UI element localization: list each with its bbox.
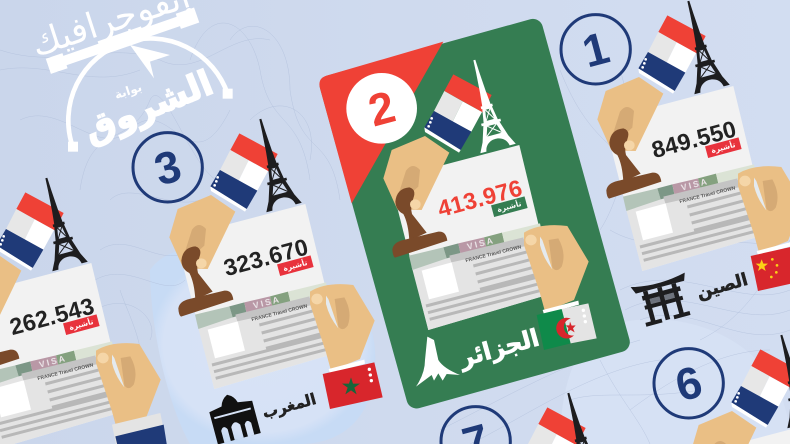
hands and stamp xyxy=(0,254,161,432)
French flag sleeve xyxy=(638,15,706,94)
visa document xyxy=(604,86,769,271)
rank badge 3: 3 xyxy=(149,140,186,195)
visa tag xyxy=(277,255,314,276)
visa count: 323.670 xyxy=(221,234,311,281)
French flag sleeve xyxy=(210,133,278,212)
hands and stamp xyxy=(169,195,375,373)
visa strip text: FRANCE Travel CROWN xyxy=(251,303,308,323)
green panel background xyxy=(317,17,632,411)
Eiffel tower xyxy=(551,388,610,444)
country name: الجزائر xyxy=(455,324,542,373)
visa document xyxy=(176,204,341,389)
visa strip text: FRANCE Travel CROWN xyxy=(465,244,522,264)
visa strip text: FRANCE Travel CROWN xyxy=(37,362,94,382)
Eiffel tower xyxy=(457,55,516,153)
icon: martyrs monument xyxy=(416,337,460,387)
French flag sleeve xyxy=(731,349,790,428)
card: rank 7 partial xyxy=(441,388,610,444)
French flag sleeve xyxy=(424,74,492,153)
French flag sleeve xyxy=(0,192,64,271)
Algerian flag sleeve xyxy=(537,303,597,350)
visa strip text: FRANCE Travel CROWN xyxy=(679,185,736,205)
visa document xyxy=(0,263,127,444)
rank badge 3 xyxy=(133,133,202,202)
red corner triangle xyxy=(319,42,443,203)
visa tag: تأشيرة xyxy=(710,139,737,155)
visa strip text: VISA xyxy=(38,353,68,370)
hands and stamp xyxy=(383,136,589,314)
visa strip text xyxy=(33,347,94,382)
country name: الصين xyxy=(695,270,750,303)
French flag sleeve xyxy=(518,407,586,444)
visa tag xyxy=(705,137,742,158)
card: Morocco rank 3 xyxy=(133,114,383,444)
visa count: 262.543 xyxy=(7,293,97,340)
hands and stamp xyxy=(597,77,790,255)
card: China rank 1 xyxy=(561,0,790,328)
icon: Moroccan gate xyxy=(206,389,261,444)
icon: pagoda gate xyxy=(631,273,696,328)
visa tag: تأشيرة xyxy=(68,316,95,332)
country name: المغرب xyxy=(260,390,318,422)
visa document xyxy=(697,420,790,444)
visa strip text: VISA xyxy=(252,294,282,311)
Eiffel tower xyxy=(29,173,88,271)
visa tag: تأشيرة xyxy=(496,198,523,214)
logo name: الشروق xyxy=(78,63,219,151)
visa strip text xyxy=(461,229,522,264)
hands and stamp xyxy=(690,411,790,444)
rank badge 2 xyxy=(346,73,417,144)
Eiffel tower xyxy=(764,330,790,428)
logo: infographic portal xyxy=(26,0,233,152)
rank badge 7 xyxy=(441,407,510,444)
visa count: 849.550 xyxy=(649,116,739,163)
visa strip text xyxy=(675,170,736,205)
card: left partial rank 5 xyxy=(0,173,169,444)
visa document xyxy=(390,145,555,330)
logo pen-tool icon xyxy=(48,15,233,152)
Moroccan flag sleeve xyxy=(323,362,383,409)
visa tag xyxy=(63,314,100,335)
rank badge 1: 1 xyxy=(577,22,614,77)
card: rank 6 partial xyxy=(654,330,790,444)
rank badge 6: 6 xyxy=(670,356,707,411)
visa strip text: VISA xyxy=(466,235,496,252)
visa count: 413.976 xyxy=(435,175,525,222)
sleeve flag xyxy=(112,413,169,444)
visa strip text: VISA xyxy=(680,176,710,193)
Chinese flag sleeve xyxy=(751,244,790,291)
card: Algeria green panel xyxy=(317,17,632,411)
rank badge 2: 2 xyxy=(363,81,400,136)
Eiffel tower xyxy=(243,114,302,212)
logo small label: بوابة xyxy=(113,80,144,103)
rank badge 1 xyxy=(561,15,630,84)
Eiffel tower xyxy=(671,0,730,94)
visa tag xyxy=(491,196,528,217)
rank badge 6 xyxy=(654,349,723,418)
visa strip text xyxy=(247,288,308,323)
visa tag: تأشيرة xyxy=(282,257,309,273)
